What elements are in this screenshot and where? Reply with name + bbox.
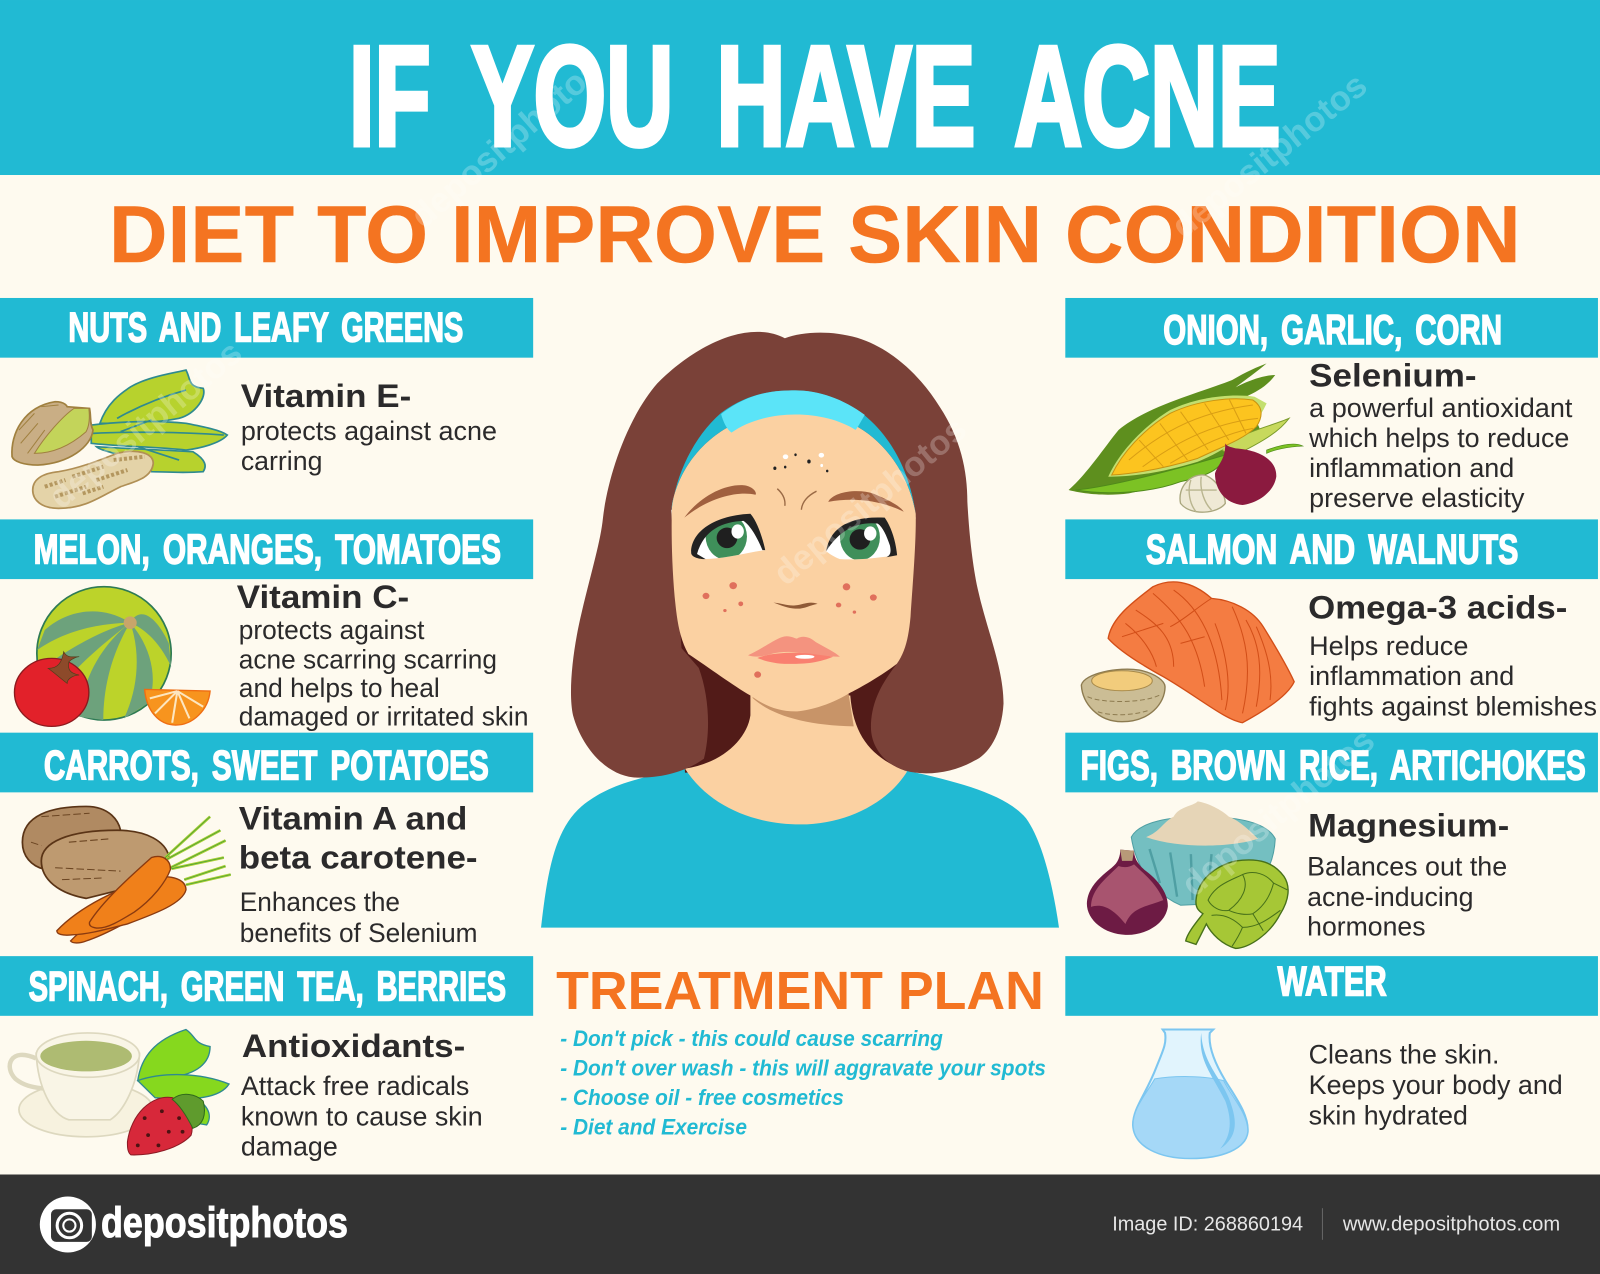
text: vitamin C: and helps to heal	[239, 673, 440, 703]
heading: SPINACH, GREEN TEA, BERRIES	[29, 963, 506, 1010]
watermarks	[42, 50, 1382, 904]
icon: corn, onion and garlic	[1069, 363, 1303, 512]
icon: tea cup, spinach and strawberry	[10, 1030, 229, 1155]
watermarks: depositphotos	[1175, 721, 1382, 904]
panel: melon, oranges, tomatoes	[0, 519, 533, 732]
hair	[571, 332, 1004, 778]
hair shadow	[678, 620, 912, 773]
illustration: girl with acne	[541, 332, 1059, 928]
list: treatment plan: - Diet and Exercise	[560, 1115, 747, 1140]
text: magnesium: Magnesium-	[1308, 808, 1509, 844]
title banner	[0, 0, 1600, 176]
heading: WATER	[1278, 957, 1387, 1004]
panel: spinach, green tea, berries	[0, 956, 533, 1162]
logo wordmark: depositphotos	[101, 1199, 348, 1247]
text: magnesium: acne-inducing	[1307, 882, 1473, 912]
panel: water	[1065, 956, 1598, 1158]
text: vitamin A: Vitamin A and	[239, 801, 467, 837]
text: vitamin A: beta carotene-	[239, 839, 478, 875]
text: vitamin C: damaged or irritated skin	[239, 702, 529, 732]
icon: fig, rice bowl and artichoke	[1087, 801, 1288, 948]
text: antioxidants: known to cause skin	[241, 1102, 483, 1132]
text: antioxidants: Antioxidants-	[242, 1028, 465, 1064]
title: IF	[349, 18, 431, 176]
text: magnesium: hormones	[1307, 912, 1426, 942]
subtitle: DIET TO IMPROVE SKIN CONDITION	[109, 190, 1520, 280]
text: vitamin E: Vitamin E-	[241, 378, 411, 414]
icon: watermelon, tomato and orange	[14, 587, 210, 726]
text: magnesium: Balances out the	[1307, 852, 1507, 882]
text: water: skin hydrated	[1309, 1100, 1468, 1130]
list: treatment plan: - Choose oil - free cosmetics	[560, 1085, 844, 1110]
text: vitamin A	[239, 801, 478, 948]
text: selenium	[1308, 358, 1573, 513]
panel: salmon and walnuts	[1065, 519, 1598, 723]
text: omega-3	[1308, 589, 1597, 721]
lips	[748, 636, 840, 664]
icon: camera logo	[40, 1196, 96, 1253]
text: omega-3: fights against blemishes	[1309, 691, 1597, 721]
text: antioxidants: damage	[241, 1132, 338, 1162]
text: omega-3: Omega-3 acids-	[1308, 589, 1567, 625]
forehead spots	[773, 453, 828, 472]
face	[672, 413, 916, 711]
text: selenium: a powerful antioxidant	[1309, 393, 1573, 423]
list: treatment plan: - Don't over wash - this will aggravate your spots	[560, 1056, 1046, 1081]
watermarks: depositphotos	[766, 410, 974, 593]
title: YOU	[471, 18, 673, 176]
shirt	[541, 769, 1059, 928]
text: vitamin C	[237, 579, 529, 732]
panel: onion, garlic, corn	[1065, 298, 1598, 513]
title: ACNE	[1014, 18, 1281, 176]
heading: NUTS AND LEAFY GREENS	[68, 303, 463, 350]
watermarks: depositphotos	[404, 50, 609, 236]
text: vitamin A: benefits of Selenium	[240, 918, 478, 948]
panel: figs, brown rice, artichokes	[1065, 733, 1598, 948]
text: vitamin C: acne scarring scarring	[239, 644, 497, 674]
text: vitamin A: Enhances the	[240, 887, 400, 917]
text: antioxidants	[241, 1028, 483, 1162]
text: antioxidants: Attack free radicals	[241, 1071, 469, 1101]
text: selenium: inflammation and	[1309, 453, 1514, 483]
footer bar	[0, 1174, 1600, 1274]
text: omega-3: inflammation and	[1309, 661, 1514, 691]
title: HAVE	[716, 18, 976, 176]
text: selenium: preserve elasticity	[1309, 483, 1525, 513]
headband	[671, 390, 916, 514]
text: vitamin E	[241, 378, 497, 476]
watermarks: depositphotos	[42, 334, 249, 516]
icon: salmon and walnut	[1081, 582, 1294, 723]
list: treatment plan	[560, 1026, 1046, 1140]
panel: nuts and leafy greens	[0, 298, 533, 508]
image id: Image ID: 268860194	[1112, 1214, 1303, 1236]
neck	[685, 696, 907, 824]
icon: spinach, pistachio and peanut	[12, 370, 227, 508]
text: vitamin C: protects against	[239, 615, 425, 645]
text: vitamin C: Vitamin C-	[237, 579, 409, 615]
list: treatment plan: - Don't pick - this could cause scarring	[560, 1026, 943, 1051]
text: magnesium	[1307, 808, 1509, 942]
watermarks: depositphotos	[1165, 66, 1374, 246]
text: water	[1309, 1039, 1563, 1130]
left eye	[691, 514, 765, 560]
panel: carrots, sweet potatoes	[0, 733, 533, 948]
text: vitamin E: carring	[241, 446, 322, 476]
text: water: Cleans the skin.	[1309, 1039, 1499, 1069]
text: omega-3: Helps reduce	[1309, 631, 1468, 661]
right eye	[826, 515, 897, 560]
heading: treatment plan: TREATMENT PLAN	[556, 961, 1044, 1021]
text: selenium: which helps to reduce	[1308, 423, 1569, 453]
heading: CARROTS, SWEET POTATOES	[44, 742, 489, 789]
title	[349, 18, 1281, 176]
icon: water flask	[1133, 1030, 1248, 1158]
website: www.depositphotos.com	[1342, 1214, 1560, 1236]
text: vitamin E: protects against acne	[241, 416, 497, 446]
acne spots	[703, 582, 877, 678]
icon: potatoes and carrots	[22, 806, 231, 943]
nose	[773, 603, 818, 609]
text: selenium: Selenium-	[1309, 358, 1477, 394]
eyebrows and frown lines	[684, 485, 904, 518]
text: water: Keeps your body and	[1309, 1070, 1563, 1100]
heading: MELON, ORANGES, TOMATOES	[34, 525, 501, 572]
